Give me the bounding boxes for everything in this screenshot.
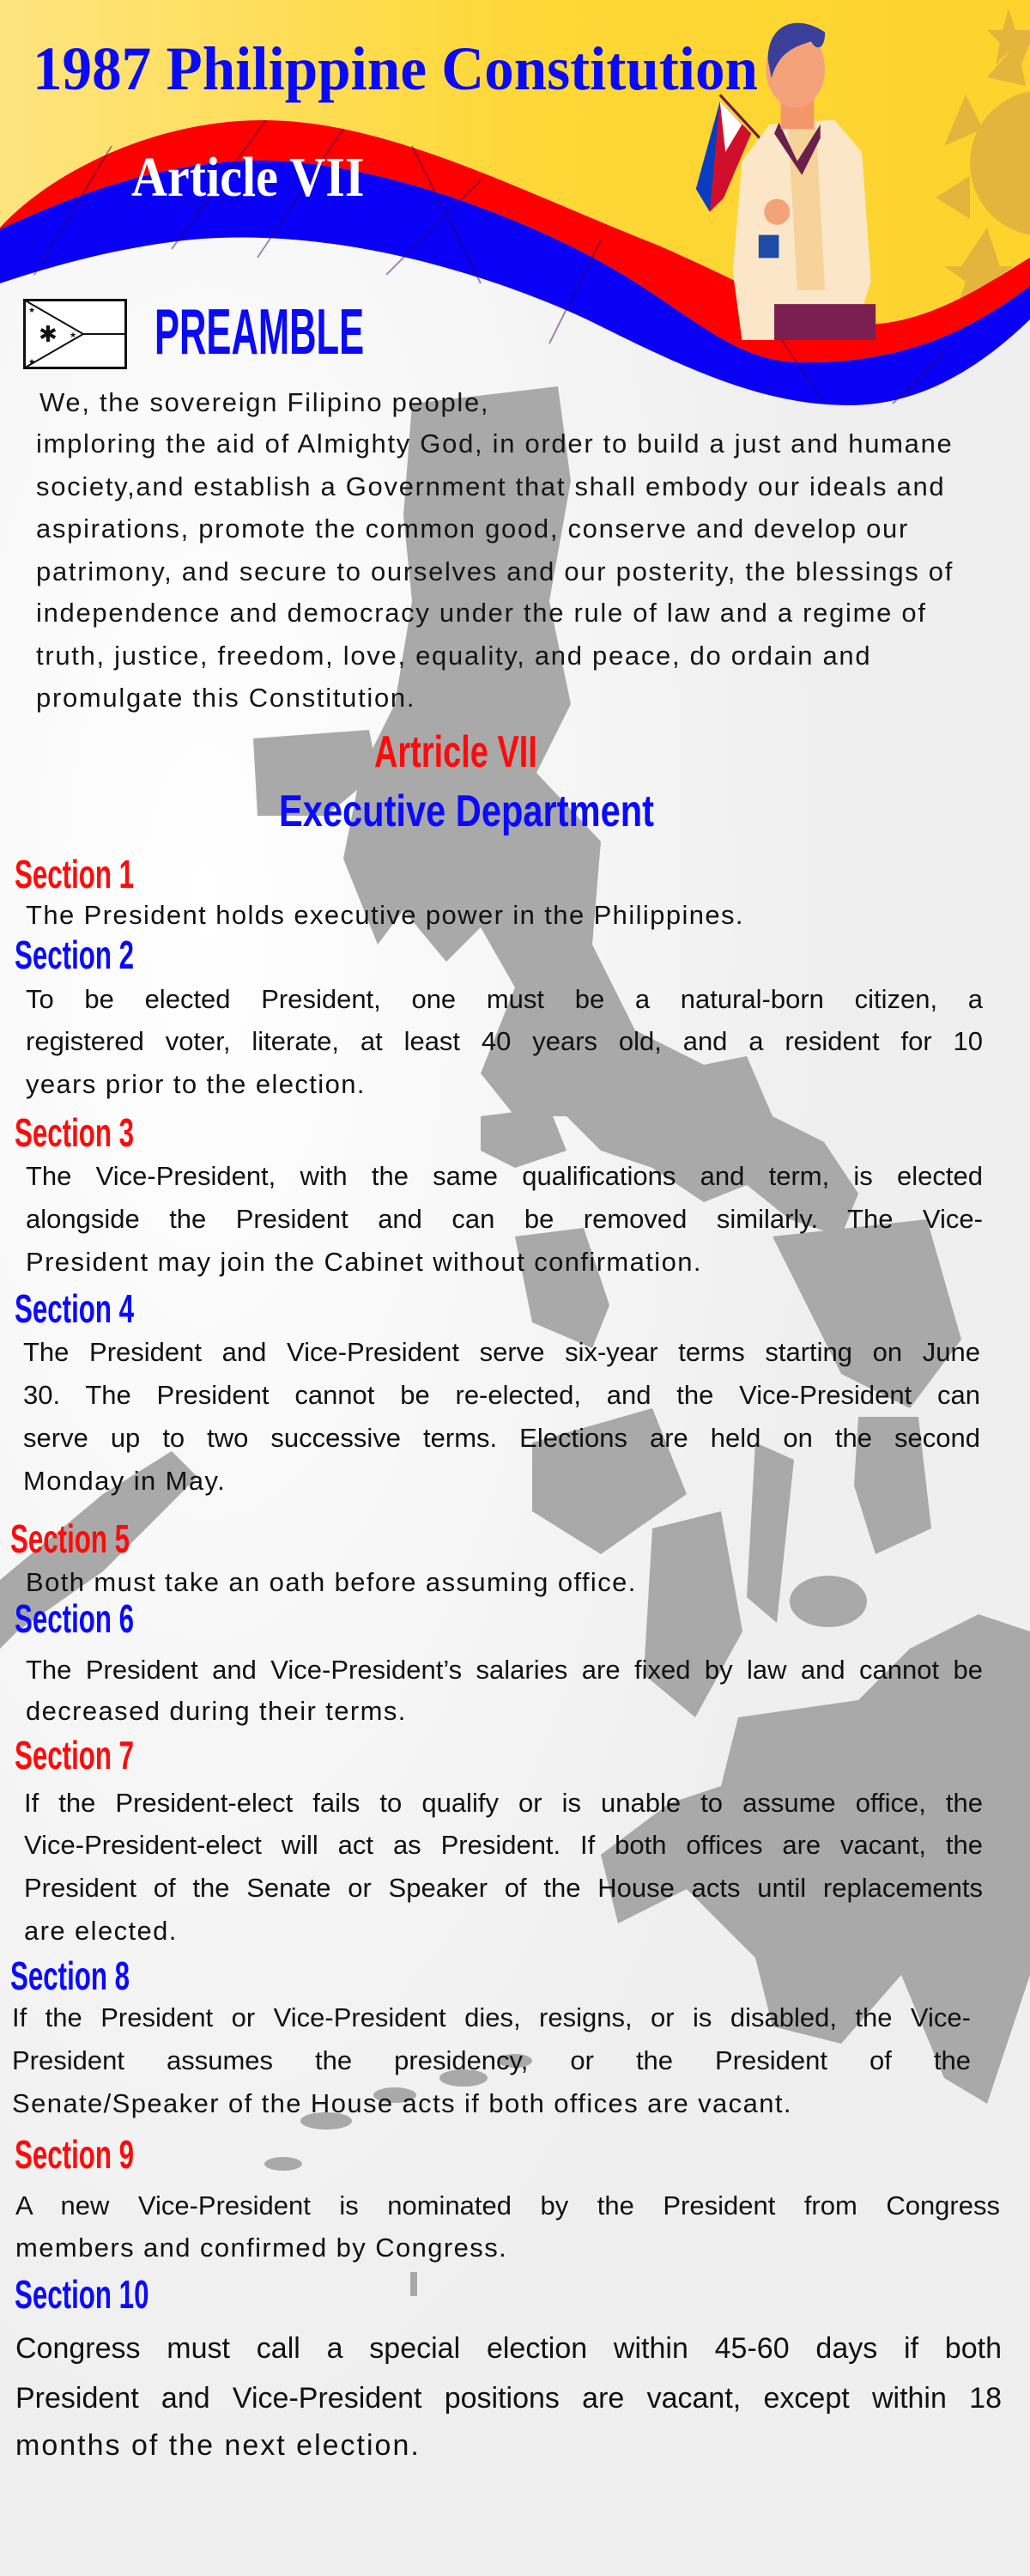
icon: sun [936,9,1030,307]
icon: flag outline [23,299,127,369]
text block: preamble: society,and establish a Government that shall embody our ideals and [36,471,945,501]
section 1: The President holds executive power in the Philippines. [26,900,744,930]
section 10 [15,2272,1002,2462]
section 4: Monday in May. [23,1466,226,1496]
section 3: President may join the Cabinet without confirmation. [26,1247,702,1277]
section 6 [15,1596,983,1726]
header banner with waves [0,0,1030,405]
section 9: A new Vice-President is nominated by the President from Congress [15,2190,1000,2221]
heading: Executive Department: Executive Department [279,787,654,836]
section 3: alongside the President and can be removed similarly. The Vice- [26,1204,983,1234]
section 2: To be elected President, one must be a natural-born citizen, a [26,984,983,1014]
heading: Article VII red: Artricle VII [374,727,537,777]
section 4: Section 4 [15,1286,134,1331]
icon: flag [696,94,807,212]
section 8: If the President or Vice-President dies, resigns, or is disabled, the Vice- [12,2002,971,2032]
title: 1987 Philippine Constitution [33,34,758,103]
section 1: Section 1 [15,852,134,896]
section 3 [15,1110,983,1277]
section 7: Section 7 [15,1733,134,1777]
subtitle: Article VII: Article VII [131,146,365,209]
text block: preamble: imploring the aid of Almighty God, in order to build a just and humane [36,428,953,459]
section 9 [15,2132,1000,2263]
heading: PREAMBLE: PREAMBLE [154,295,364,368]
text block: preamble [36,387,954,713]
section 8 [10,1953,971,2118]
section 5 [10,1516,637,1597]
section 9: members and confirmed by Congress. [15,2233,507,2263]
icon: flag outline: ★ [28,306,35,314]
section 7: Vice-President-elect will act as President. If both offices are vacant, the [24,1830,983,1860]
icon: flag outline: ★ [28,357,35,366]
section 10: President and Vice-President positions are vacant, except within 18 [15,2382,1002,2415]
text block: preamble: independence and democracy under the rule of law and a regime of [36,598,927,628]
section 2: registered voter, literate, at least 40 years old, and a resident for 10 [26,1026,983,1056]
text block: preamble: patrimony, and secure to ourselves and our posterity, the blessings of [36,556,954,586]
icon: flag outline: ✱ [39,322,58,348]
section 5: Both must take an oath before assuming office. [26,1567,637,1597]
section 6: decreased during their terms. [26,1696,407,1726]
section 7: President of the Senate or Speaker of the House acts until replacements [24,1873,983,1903]
section 6: The President and Vice-President’s salaries are fixed by law and cannot be [26,1655,983,1685]
section 4 [15,1286,980,1496]
section 1 [15,852,744,930]
section 3: Section 3 [15,1110,134,1155]
text block: preamble: truth, justice, freedom, love, equality, and peace, do ordain and [36,641,871,671]
section 2: Section 2 [15,933,134,977]
section 7: are elected. [24,1916,178,1946]
section 4: serve up to two successive terms. Elections are held on the second [23,1423,980,1453]
section 8: Section 8 [10,1953,130,1998]
text block: preamble: promulgate this Constitution. [36,683,415,713]
section 8: President assumes the presidency, or the President of the [12,2045,971,2075]
wave: blue [0,161,1030,405]
text block: preamble: aspirations, promote the common good, conserve and develop our [36,513,909,544]
text block: preamble: We, the sovereign Filipino people, [39,387,489,417]
section 2: years prior to the election. [26,1069,366,1099]
section 4: 30. The President cannot be re-elected, and the Vice-President can [23,1380,980,1410]
section 10: months of the next election. [15,2429,421,2462]
section 6: Section 6 [15,1596,134,1641]
wave: red [0,120,1030,362]
section 8: Senate/Speaker of the House acts if both offices are vacant. [12,2088,792,2118]
section 10: Section 10 [15,2272,148,2317]
illustration: man holding flag [695,22,876,340]
section 2 [15,933,983,1099]
section 4: The President and Vice-President serve six-year terms starting on June [23,1337,980,1367]
section 3: The Vice-President, with the same qualifications and term, is elected [26,1161,983,1191]
section 9: Section 9 [15,2132,134,2177]
section 7: If the President-elect fails to qualify or is unable to assume office, the [24,1788,983,1818]
section 10: Congress must call a special election within 45-60 days if both [15,2332,1002,2365]
icon: flag outline: ★ [70,331,76,339]
section 5: Section 5 [10,1516,130,1561]
section 7 [15,1733,983,1946]
